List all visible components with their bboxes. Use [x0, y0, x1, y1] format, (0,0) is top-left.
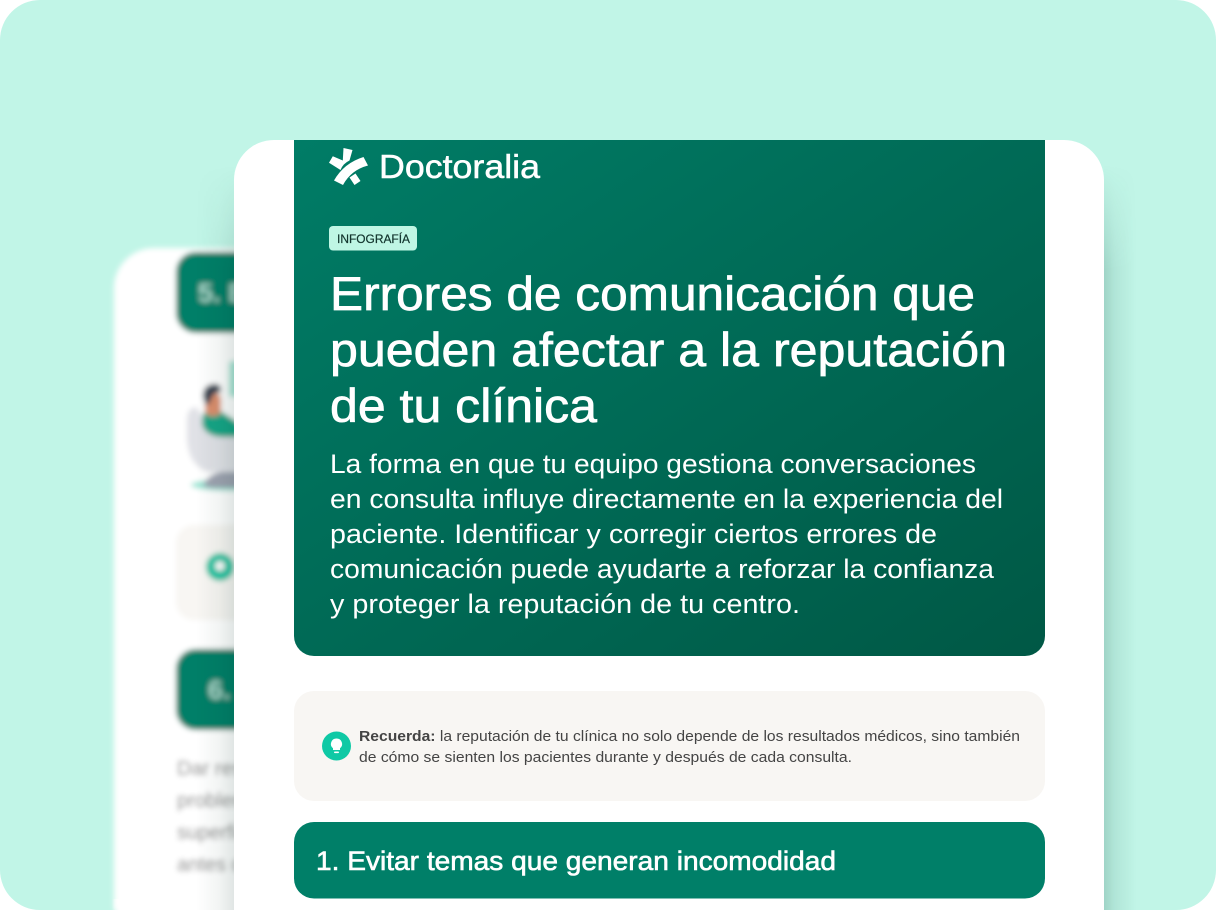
panel: front page	[234, 140, 1104, 910]
front page shadow	[196, 165, 1136, 910]
intro paragraph: y proteger la reputación de tu centro.	[330, 589, 800, 619]
intro paragraph	[330, 449, 1003, 619]
intro paragraph: comunicación puede ayudarte a reforzar la confianza	[330, 554, 995, 584]
callout text: Recuerda: la reputación de tu clínica no solo depende de los resultados médicos, sino también	[359, 729, 1020, 745]
back page bottom edge	[112, 899, 236, 910]
callout text: de cómo se sienten los pacientes durante y después de cada consulta.	[359, 750, 852, 766]
back paragraph: antes de	[177, 854, 254, 876]
back paragraph	[177, 758, 313, 876]
back paragraph: Dar respuestas	[177, 758, 313, 780]
callout text	[359, 729, 1020, 766]
callout: recuerda	[294, 691, 1045, 801]
back tip box	[176, 525, 306, 620]
back heading 6	[176, 649, 306, 730]
hero background	[294, 140, 1045, 656]
callout background	[294, 691, 1045, 801]
back heading 6: 6. N	[208, 675, 258, 705]
logo: Doctoralia	[329, 148, 541, 185]
back heading 5	[176, 252, 306, 333]
icon: Doctoralia star	[329, 148, 368, 185]
title: pueden afectar a la reputación	[330, 323, 1007, 376]
title	[330, 267, 1007, 432]
intro paragraph: paciente. Identificar y corregir ciertos errores de	[330, 519, 937, 549]
title: Errores de comunicación que	[330, 267, 975, 320]
illustration: seated person	[187, 361, 265, 491]
back heading 5: 5. E	[198, 278, 246, 308]
icon: light bulb	[322, 732, 351, 760]
back paragraph: problemas	[177, 790, 270, 812]
back paragraph: superficiales	[177, 822, 288, 844]
panel: blurred back page	[114, 248, 313, 910]
section heading 1: 1. Evitar temas que generan incomodidad	[316, 846, 836, 876]
tag: infografía	[329, 226, 417, 250]
section heading 1	[294, 822, 1045, 898]
back page sheet	[114, 248, 300, 910]
panel: hero	[294, 140, 1045, 656]
wordmark: Doctoralia	[379, 148, 541, 185]
tag: infografía: INFOGRAFÍA	[337, 233, 410, 246]
intro paragraph: La forma en que tu equipo gestiona conversaciones	[330, 449, 976, 479]
intro paragraph: en consulta influye directamente en la experiencia del	[330, 484, 1003, 514]
title: de tu clínica	[330, 379, 598, 432]
